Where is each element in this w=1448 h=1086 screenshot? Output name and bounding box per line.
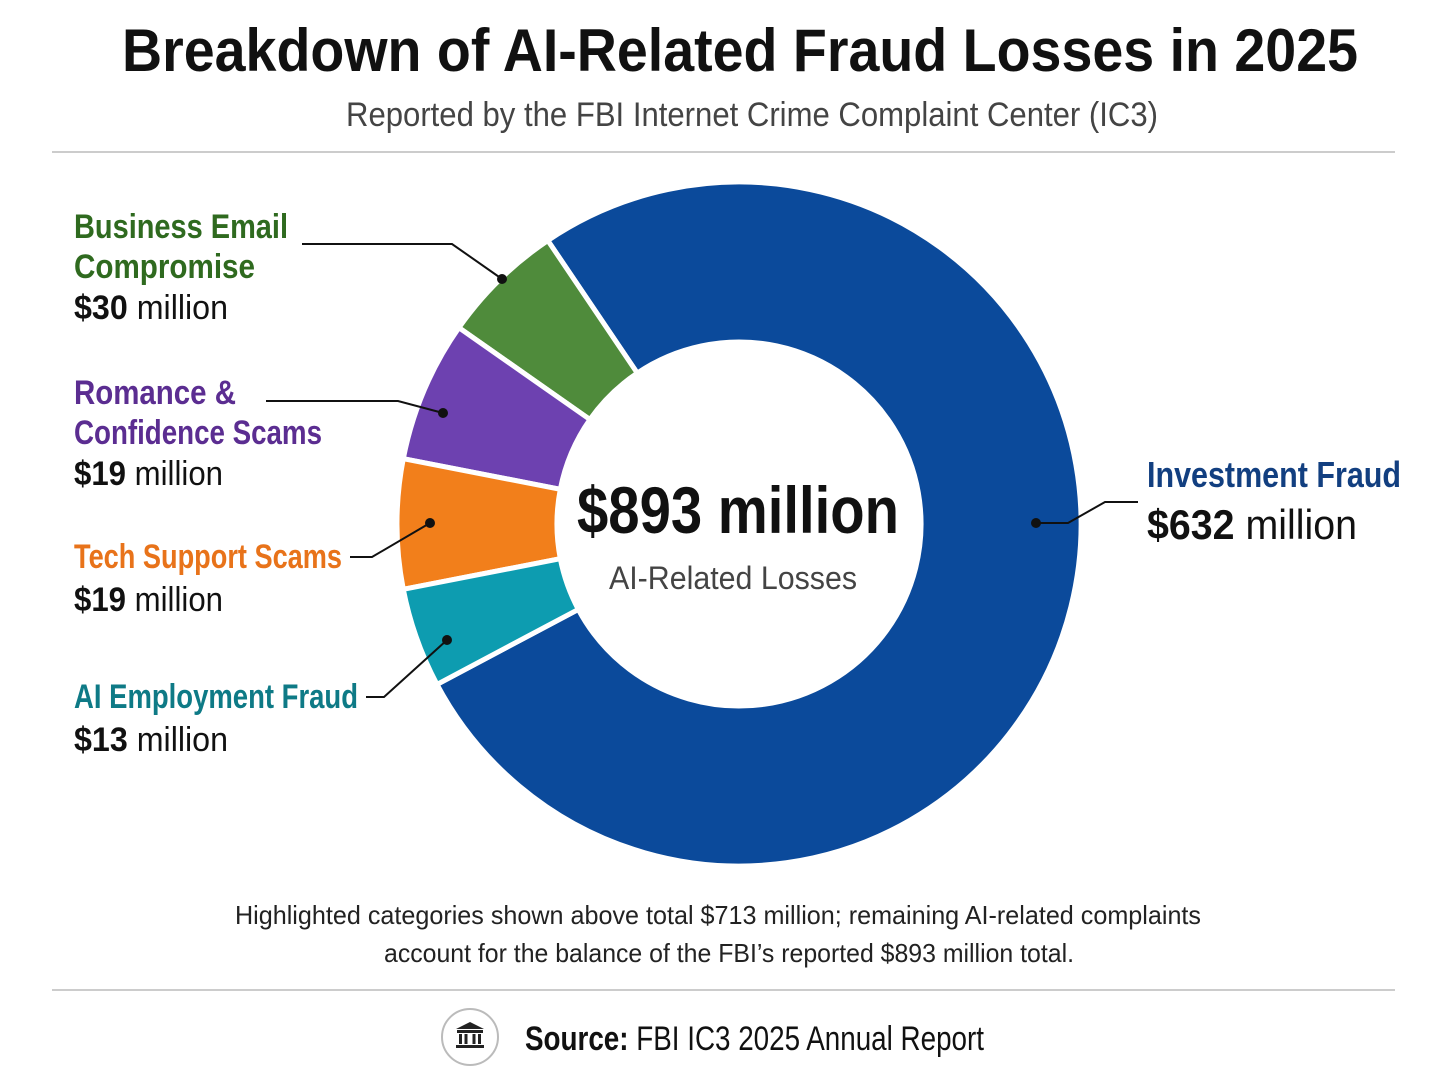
label: investment fraud: $632 million xyxy=(1147,501,1357,548)
center label: AI-Related Losses xyxy=(609,560,857,596)
donut chart xyxy=(397,182,1081,866)
slice: business email compromise xyxy=(459,240,637,420)
label: AI employment: $13 million xyxy=(74,721,228,759)
subtitle: Reported by the FBI Internet Crime Complaint Center (IC3) xyxy=(346,96,1158,134)
label: AI employment: AI Employment Fraud xyxy=(74,678,358,716)
leader lines xyxy=(266,244,1138,697)
label: romance: Romance & xyxy=(74,374,236,412)
label: romance: Confidence Scams xyxy=(74,414,322,452)
label: business email compromise: Business Email xyxy=(74,208,288,246)
slice: investment fraud xyxy=(437,182,1081,866)
source: Source: FBI IC3 2025 Annual Report xyxy=(525,1020,984,1058)
label: investment fraud: Investment Fraud xyxy=(1147,454,1401,495)
label: tech support: $19 million xyxy=(74,581,223,619)
label: business email compromise: Compromise xyxy=(74,248,255,286)
slice: AI employment xyxy=(403,559,578,684)
label: tech support: Tech Support Scams xyxy=(74,538,342,576)
footnote: account for the balance of the FBI’s reported $893 million total. xyxy=(384,938,1074,968)
label: business email compromise xyxy=(74,208,288,327)
label: business email compromise: $30 million xyxy=(74,289,228,327)
label: tech support xyxy=(74,538,342,619)
center total: $893 million xyxy=(577,473,899,547)
label: romance: $19 million xyxy=(74,455,223,493)
footnote: Highlighted categories shown above total $713 million; remaining AI-related complaints xyxy=(235,900,1201,930)
slice: tech support xyxy=(397,459,560,589)
label: investment fraud xyxy=(1147,454,1401,548)
icon: institution xyxy=(442,1009,498,1065)
label: romance xyxy=(74,374,322,493)
slice: romance scams xyxy=(403,328,590,489)
title: Breakdown of AI-Related Fraud Losses in 2025 xyxy=(122,17,1358,84)
footnote xyxy=(235,900,1201,968)
label: AI employment xyxy=(74,678,358,759)
